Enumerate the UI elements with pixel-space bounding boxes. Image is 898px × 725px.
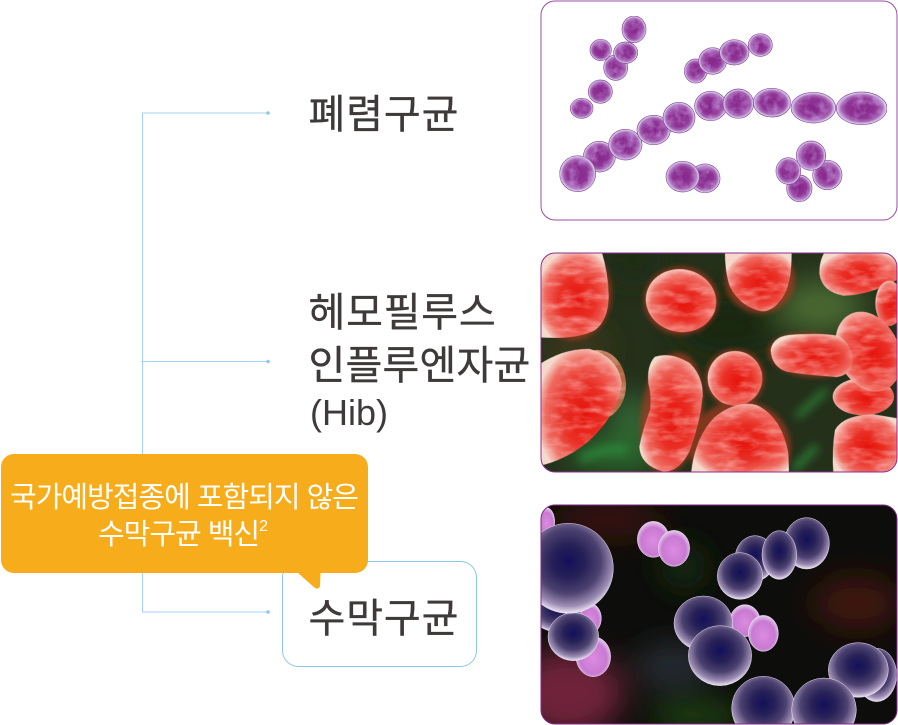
label: 헤모필루스 인플루엔자균 (Hib) [308, 291, 530, 433]
callout: 2 [259, 518, 268, 535]
panel: 헤모필루스 인플루엔자균 image [535, 240, 898, 493]
label: 헤모필루스 인플루엔자균 (Hib): 인플루엔자균 [308, 344, 530, 388]
box: 수막구균: 수막구균 [308, 597, 459, 641]
callout [1, 454, 368, 589]
box: 수막구균 [282, 562, 476, 666]
label: 헤모필루스 인플루엔자균 (Hib): 헤모필루스 [308, 291, 496, 335]
label: 폐렴구균: 폐렴구균 [308, 93, 459, 137]
label: 헤모필루스 인플루엔자균 (Hib): (Hib) [310, 392, 388, 433]
callout: 수막구균 백신 [98, 519, 259, 551]
callout: 국가예방접종에 포함되지 않은 [10, 482, 358, 514]
panel: 수막구균 image [510, 503, 898, 725]
connector lines [141, 111, 270, 614]
panel: 폐렴구균 bacteria image [541, 1, 897, 220]
